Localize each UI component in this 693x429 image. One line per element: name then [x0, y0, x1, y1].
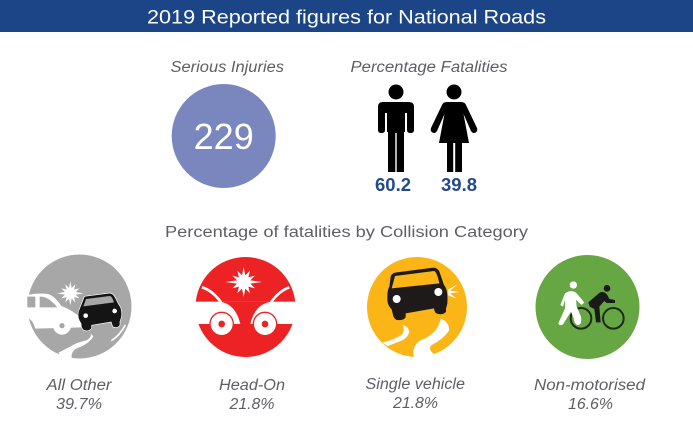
label: head-on: 21.8% [228, 396, 275, 413]
icon: non-motorised [536, 255, 640, 359]
icon: all other collisions [27, 254, 131, 361]
label: single vehicle: Single vehicle [366, 376, 465, 393]
value: female percentage: 39.8 [441, 175, 477, 195]
icon: female figure [431, 84, 477, 172]
label: head-on [219, 377, 285, 413]
stat circle: 229 serious injuries: 229 [194, 116, 254, 157]
header bar [0, 0, 693, 32]
heading: percentage fatalities: Percentage Fatalities [350, 59, 508, 76]
value: male percentage: 60.2 [375, 175, 411, 195]
icon: male figure [378, 84, 414, 172]
title: 2019 Reported figures for National Roads [147, 8, 546, 28]
label: non-motorised [534, 377, 647, 413]
label: single vehicle [366, 376, 465, 412]
heading: serious injuries: Serious Injuries [170, 59, 284, 76]
section heading: Percentage of fatalities by Collision Category [165, 224, 528, 241]
label: head-on: Head-On [219, 377, 285, 394]
icon: single vehicle collision [367, 257, 467, 363]
label: all other [45, 377, 112, 413]
label: all other: All Other [45, 377, 112, 394]
icon: head-on collision [194, 257, 298, 357]
stat circle: 229 serious injuries [172, 84, 276, 188]
label: non-motorised: 16.6% [568, 396, 613, 413]
label: non-motorised: Non-motorised [534, 377, 647, 394]
label: single vehicle: 21.8% [392, 395, 438, 412]
label: all other: 39.7% [56, 396, 102, 413]
